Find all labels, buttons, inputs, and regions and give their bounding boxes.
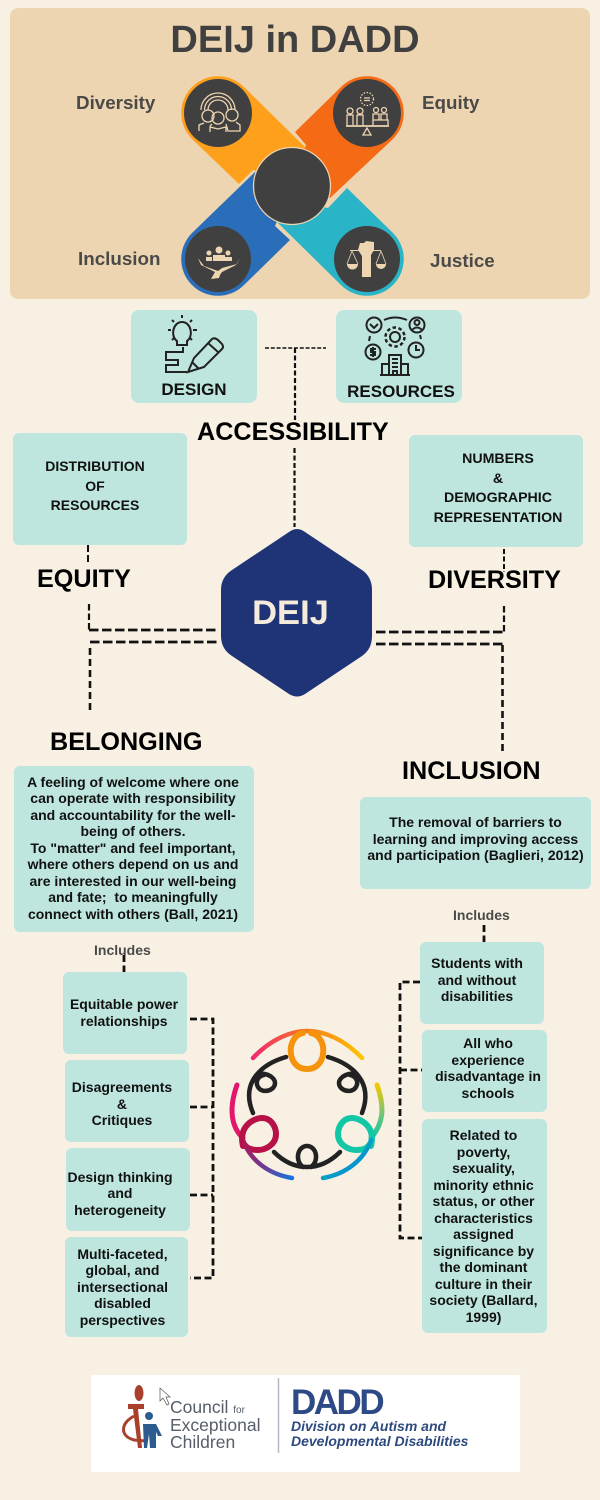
box: related characteristics: characteristics [434, 1210, 533, 1226]
band: inclusion [181, 172, 292, 296]
box: numbers and demographic representation [409, 435, 583, 547]
box: related characteristics: 1999) [466, 1308, 501, 1324]
logo text: council: Exceptional [170, 1414, 260, 1434]
box: equitable power relationships [63, 972, 187, 1054]
logo text: council [170, 1397, 260, 1452]
box: belonging text: where others depend on us and [28, 856, 238, 872]
box: belonging text: being of others. [80, 823, 185, 839]
band: equity [292, 76, 404, 198]
box: belonging text: and fate; to meaningfully [48, 889, 218, 905]
hexagon: DEIJ: DEIJ [252, 594, 329, 632]
logo panel [91, 1375, 520, 1472]
box: numbers and demographic representation: REPRESENTATION [434, 510, 562, 526]
box: distribution of resources: OF [85, 478, 105, 494]
box: design [131, 310, 257, 403]
box: disadvantage: schools [462, 1084, 514, 1100]
box: design thinking: heterogeneity [74, 1202, 166, 1218]
label: Justice: Justice [430, 250, 495, 271]
box: inclusion text [360, 797, 591, 889]
band: justice [278, 188, 404, 296]
heading: equity: EQUITY [37, 565, 131, 593]
label: includes right: Includes [453, 907, 510, 923]
box: related characteristics: the dominant [440, 1259, 527, 1275]
box: students [420, 942, 544, 1024]
box: distribution of resources: RESOURCES [51, 497, 139, 513]
icon: design [165, 315, 224, 374]
box: numbers and demographic representation: & [493, 470, 503, 486]
box: belonging text: To "matter" and feel important, [30, 840, 236, 856]
box: related characteristics: poverty, [457, 1144, 510, 1160]
box: related characteristics: status, or other [433, 1193, 534, 1209]
box: students: and without [438, 972, 516, 988]
box: belonging text: A feeling of welcome where one [27, 774, 239, 790]
box: design thinking: Design thinking [68, 1169, 172, 1185]
heading: accessibility: ACCESSIBILITY [197, 418, 389, 446]
box: related characteristics: assigned [453, 1226, 514, 1242]
box: design: DESIGN [161, 380, 227, 399]
box: belonging text: are interested in our well-being [30, 873, 236, 889]
box: resources [336, 310, 462, 403]
label: Diversity: Diversity [76, 92, 155, 113]
box: belonging text: and accountability for the well- [30, 807, 236, 823]
label: Equity: Equity [422, 92, 479, 113]
heading: diversity: DIVERSITY [428, 566, 561, 594]
logo text: council: Council for [170, 1397, 245, 1417]
box: distribution of resources [13, 433, 187, 545]
box: disadvantage [422, 1030, 547, 1112]
box: resources: RESOURCES [347, 382, 455, 401]
box: perspectives [65, 1237, 188, 1337]
box: perspectives: perspectives [80, 1312, 165, 1328]
heading: belonging: BELONGING [50, 728, 203, 756]
logo text: DADD: DADD [291, 1383, 382, 1422]
box: design thinking [66, 1148, 190, 1231]
box: design thinking: and [108, 1185, 132, 1201]
box: disadvantage: disadvantage in [435, 1068, 541, 1084]
panel: header [10, 8, 590, 299]
box: disagreements and critiques: Critiques [92, 1112, 152, 1128]
box: related characteristics: culture in their [435, 1276, 532, 1292]
icon: resources [364, 316, 426, 376]
box: students: disabilities [441, 988, 513, 1004]
label: includes left: Includes [94, 942, 151, 958]
box: related characteristics: sexuality, [452, 1160, 515, 1176]
box: related characteristics: significance by [433, 1242, 534, 1258]
box: disagreements and critiques [65, 1060, 189, 1142]
box: disagreements and critiques: Disagreements [72, 1079, 172, 1095]
band: diversity [181, 76, 307, 186]
box: equitable power relationships: Equitable power relationships [70, 996, 178, 1028]
hexagon: DEIJ [221, 529, 372, 696]
box: perspectives: intersectional [77, 1279, 168, 1295]
box: perspectives: disabled [94, 1295, 151, 1311]
logo text: division: Division on Autism and [291, 1418, 446, 1434]
center circle [254, 148, 330, 224]
label: Inclusion: Inclusion [78, 248, 160, 269]
box: disagreements and critiques: & [117, 1096, 127, 1112]
box: belonging text: can operate with responsibility [30, 790, 236, 806]
box: perspectives: Multi-faceted, [77, 1246, 168, 1262]
box: distribution of resources: DISTRIBUTION [45, 458, 145, 474]
logo text: council: Children [170, 1432, 235, 1452]
box: related characteristics: minority ethnic [433, 1176, 534, 1192]
box: related characteristics [422, 1119, 547, 1333]
title: DEIJ in DADD [170, 19, 420, 61]
heading: inclusion: INCLUSION [402, 757, 541, 785]
box: numbers and demographic representation: DEMOGRAPHIC [444, 490, 552, 506]
box: perspectives: global, and [86, 1262, 159, 1278]
dashed connectors [87, 347, 506, 751]
box: related characteristics: Related to [450, 1127, 517, 1143]
box: inclusion text: The removal of barriers to learning and improving access and participation (Baglieri, 2012) [367, 814, 584, 863]
logo text: division: Developmental Disabilities [291, 1433, 468, 1449]
box: disadvantage: experience [451, 1052, 525, 1068]
box: belonging text [14, 766, 254, 932]
box: belonging text: connect with others (Ball, 2021) [28, 906, 238, 922]
X diagram [181, 76, 404, 296]
box: related characteristics: society (Ballard, [429, 1292, 538, 1308]
box: disadvantage: All who [463, 1035, 513, 1051]
box: numbers and demographic representation: NUMBERS [462, 451, 534, 467]
box: students: Students with [431, 955, 523, 971]
icon: circle of people [230, 1028, 384, 1180]
logo text: division [291, 1418, 468, 1449]
